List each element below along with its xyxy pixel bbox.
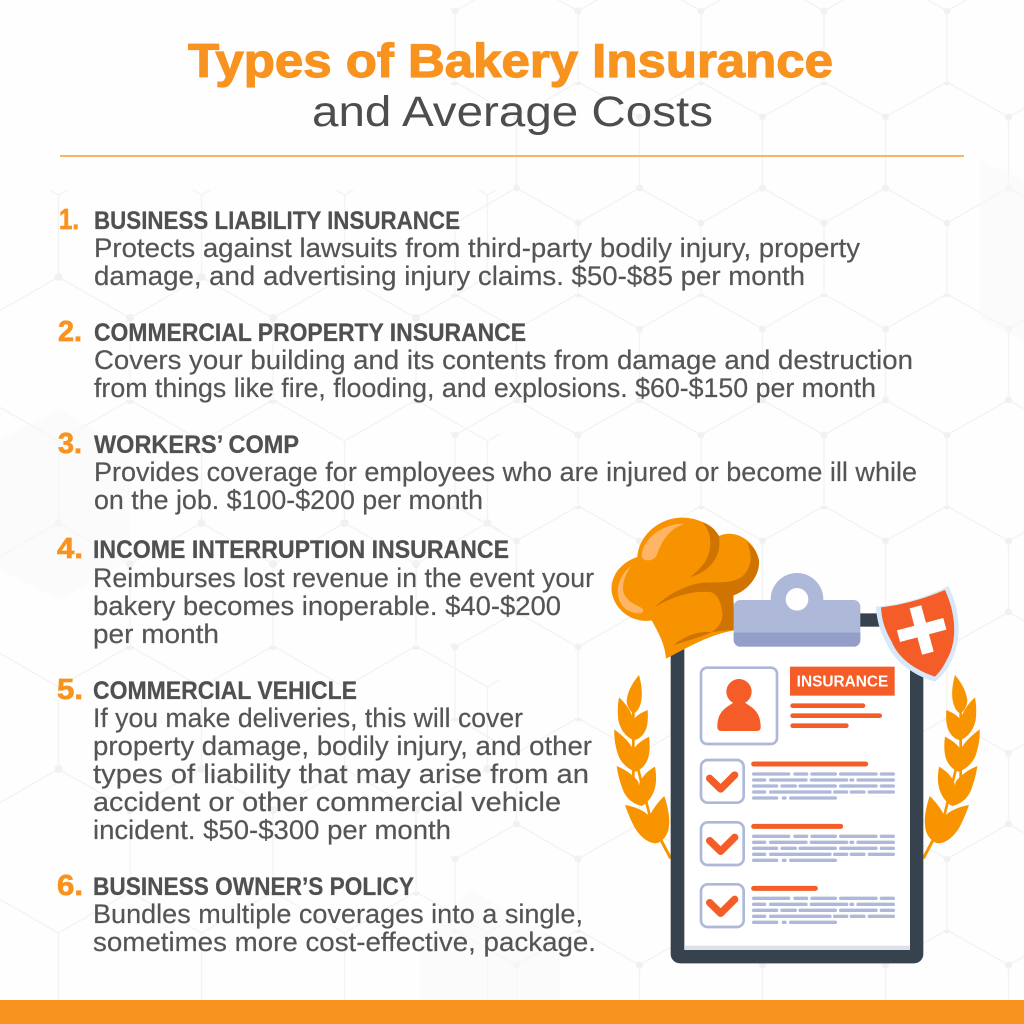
- description 5: types of liability that may arise from an: [93, 759, 589, 789]
- icon: shield with cross: [876, 586, 959, 682]
- clipboard board: [671, 613, 923, 963]
- heading 2: COMMERCIAL PROPERTY INSURANCE: [94, 319, 526, 347]
- description 5: property damage, bodily injury, and other: [93, 731, 592, 761]
- description 5: accident or other commercial vehicle: [93, 787, 561, 817]
- description 2: [94, 345, 913, 403]
- checklist item 1: [701, 760, 893, 803]
- description 1: Protects against lawsuits from third-party bodily injury, property: [94, 233, 861, 263]
- description 2: Covers your building and its contents from damage and destruction: [94, 345, 913, 375]
- item 4: income interruption insurance: [57, 533, 594, 649]
- description 1: damage, and advertising injury claims. $50-$85 per month: [94, 261, 805, 291]
- heading 6: BUSINESS OWNER’S POLICY: [93, 873, 414, 901]
- description 4: [93, 563, 594, 649]
- heading 1: BUSINESS LIABILITY INSURANCE: [94, 207, 460, 235]
- description 2: from things like fire, flooding, and explosions. $60-$150 per month: [94, 373, 876, 403]
- heading 3: WORKERS’ COMP: [94, 431, 299, 459]
- heading 4: INCOME INTERRUPTION INSURANCE: [93, 536, 509, 564]
- title line 1: Types of Bakery Insurance: [188, 34, 833, 87]
- description 5: [93, 703, 592, 845]
- description 3: on the job. $100-$200 per month: [94, 485, 483, 515]
- clipboard clip: [734, 573, 860, 647]
- description 3: [94, 457, 917, 515]
- insurance label: [790, 667, 895, 696]
- item 2: commercial property insurance: [58, 316, 913, 403]
- item 3: workers' comp: [58, 428, 917, 515]
- description 5: If you make deliveries, this will cover: [93, 703, 523, 733]
- description 4: Reimburses lost revenue in the event your: [93, 563, 594, 593]
- icon: right wheat: [923, 675, 980, 858]
- bottom orange bar: [0, 1000, 1024, 1024]
- item 6: business owner's policy: [57, 870, 596, 957]
- title line 2: and Average Costs: [312, 88, 713, 136]
- number 5: 5.: [57, 674, 83, 706]
- insurance label: INSURANCE: [797, 674, 888, 691]
- description 6: sometimes more cost-effective, package.: [93, 927, 596, 957]
- description 4: per month: [93, 619, 219, 649]
- description 1: [94, 233, 861, 291]
- description 3: Provides coverage for employees who are injured or become ill while: [94, 457, 917, 487]
- icon: chef hat: [612, 518, 759, 659]
- number 4: 4.: [57, 533, 83, 565]
- item 5: commercial vehicle: [57, 674, 592, 845]
- illustration: insurance clipboard: [671, 613, 923, 963]
- checklist: [701, 760, 893, 927]
- checklist item 2: [701, 822, 893, 865]
- description 6: Bundles multiple coverages into a single,: [93, 899, 583, 929]
- checklist item 3: [701, 884, 893, 927]
- number 1: 1.: [59, 204, 79, 236]
- number 3: 3.: [58, 428, 82, 460]
- label lines: [793, 706, 880, 726]
- number 6: 6.: [57, 870, 83, 902]
- heading 5: COMMERCIAL VEHICLE: [93, 677, 357, 705]
- number 2: 2.: [58, 316, 82, 348]
- id photo frame with person: [701, 668, 777, 744]
- description 6: [93, 899, 596, 957]
- icon: left wheat: [614, 675, 671, 858]
- clipboard clip and shield: [734, 573, 959, 682]
- title: [188, 34, 833, 136]
- description 5: incident. $50-$300 per month: [93, 815, 451, 845]
- item 1: business liability insurance: [59, 204, 861, 291]
- description 4: bakery becomes inoperable. $40-$200: [93, 591, 561, 621]
